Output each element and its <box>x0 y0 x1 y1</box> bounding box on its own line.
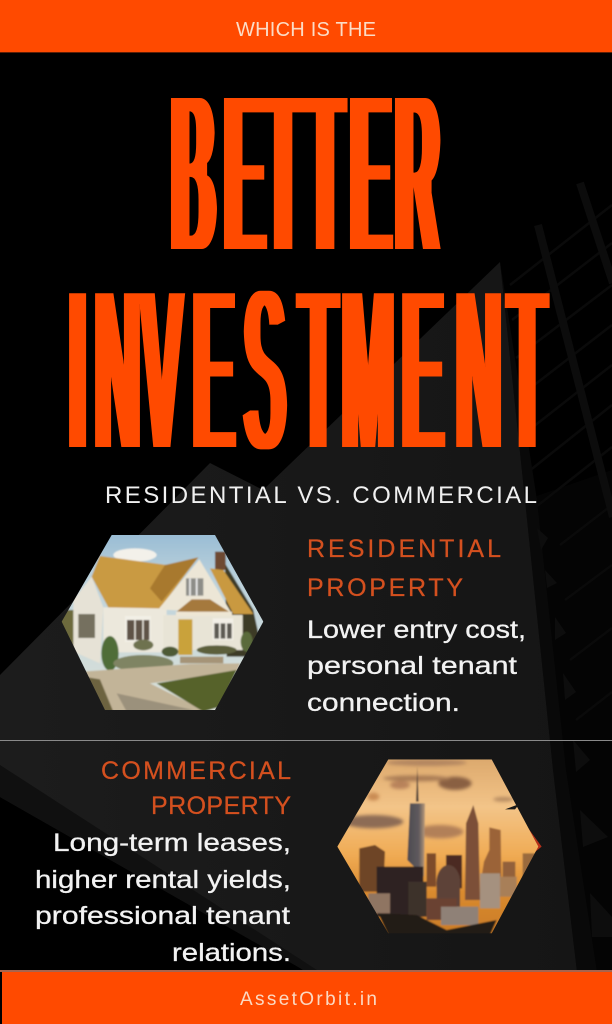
residential description <box>307 616 526 717</box>
commercial heading <box>101 757 291 820</box>
residential text block <box>307 535 526 717</box>
commercial text block <box>35 757 291 967</box>
commercial description: relations. <box>172 939 291 967</box>
residential heading <box>307 535 501 602</box>
commercial description: higher rental yields, <box>35 866 291 894</box>
image: residential house in hexagon <box>62 535 264 710</box>
top banner <box>0 0 612 53</box>
footer text: AssetOrbit.in <box>240 989 377 1010</box>
commercial heading: PROPERTY <box>151 792 291 820</box>
commercial heading: COMMERCIAL <box>101 757 291 785</box>
residential description: connection. <box>307 689 460 717</box>
residential heading: PROPERTY <box>307 574 463 602</box>
residential description: personal tenant <box>307 652 517 680</box>
commercial description: professional tenant <box>35 902 290 930</box>
image: commercial skyline in hexagon <box>337 759 542 934</box>
footer banner <box>0 970 612 1024</box>
residential description: Lower entry cost, <box>307 616 526 644</box>
commercial description <box>35 829 291 967</box>
title <box>69 41 546 505</box>
title line: better: BETTER <box>172 41 439 306</box>
residential heading: RESIDENTIAL <box>307 535 501 563</box>
banner text: WHICH IS THE <box>236 19 376 41</box>
commercial description: Long-term leases, <box>53 829 291 857</box>
title line: investment: INVESTMENT <box>69 237 546 505</box>
subtitle: RESIDENTIAL VS. COMMERCIAL <box>105 482 537 509</box>
